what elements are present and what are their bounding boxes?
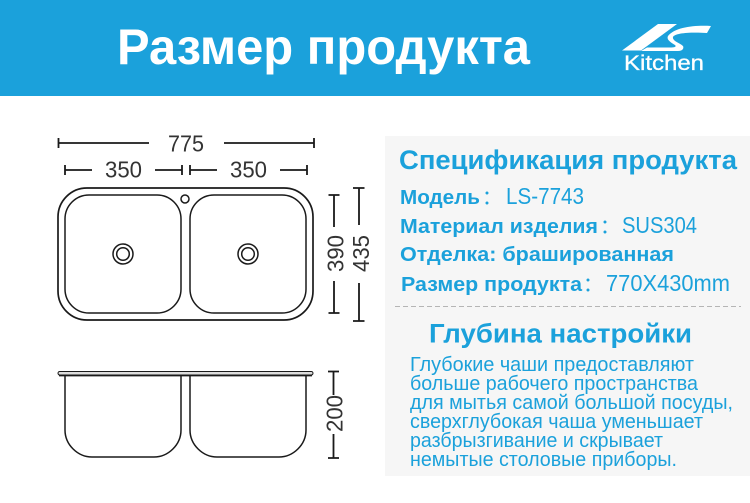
sink side view (58, 372, 313, 457)
dimension: height 435: 435 (348, 235, 374, 272)
spec: size: Размер продукта (401, 274, 583, 296)
left bowl (65, 195, 181, 313)
dimension: bowl width 350 right (190, 156, 307, 182)
title: Размер продукта (117, 19, 531, 75)
dimension: height 435 (348, 188, 374, 321)
spec: material: SUS304 (622, 212, 697, 238)
faucet hole (181, 195, 189, 203)
description text: немытые столовые приборы. (410, 449, 677, 471)
description text: для мытья самой большой посуды, (410, 392, 733, 414)
dimension: height 390 (322, 195, 348, 313)
dimension: depth 200 (322, 372, 348, 458)
description text: больше рабочего пространства (410, 373, 699, 395)
dimension: height 390: 390 (322, 235, 348, 272)
spec: model: ： (482, 187, 502, 209)
description text: Глубокие чаши предоставляют (410, 354, 694, 376)
dimension: overall width 775: 775 (168, 130, 204, 156)
dimension: overall width 775 (58, 130, 314, 156)
spec: model (400, 183, 584, 209)
heading: specification: Спецификация продукта (399, 145, 738, 175)
spec: size: ： (583, 274, 603, 296)
spec: size (401, 270, 730, 296)
left bowl profile (65, 375, 181, 457)
dimension: bowl width 350 right: 350 (230, 156, 267, 182)
spec: finish: Отделка: брашированная (400, 244, 674, 266)
panel: specification (385, 136, 750, 476)
right drain (238, 244, 258, 264)
dimension: bowl width 350 left (65, 156, 182, 182)
heading: depth setting: Глубина настройки (429, 318, 692, 348)
logo wordmark: Kitchen (624, 52, 704, 75)
description text: сверхглубокая чаша уменьшает (410, 411, 703, 433)
icon: Kitchen logo (622, 24, 711, 75)
description text: разбрызгивание и скрывает (410, 430, 663, 452)
spec: model: LS-7743 (506, 183, 584, 209)
sink top view (58, 188, 313, 320)
spec: model: Модель (400, 187, 480, 209)
right bowl (190, 195, 306, 313)
spec: material: ： (600, 216, 620, 238)
dimension: depth 200: 200 (322, 395, 348, 432)
spec: material: Материал изделия (400, 216, 598, 238)
spec: material (400, 212, 697, 238)
spec: size: 770X430mm (606, 270, 730, 296)
right bowl profile (190, 375, 306, 457)
left drain (113, 244, 133, 264)
header banner (0, 0, 750, 96)
dimension: bowl width 350 left: 350 (105, 156, 142, 182)
description text (410, 354, 733, 471)
